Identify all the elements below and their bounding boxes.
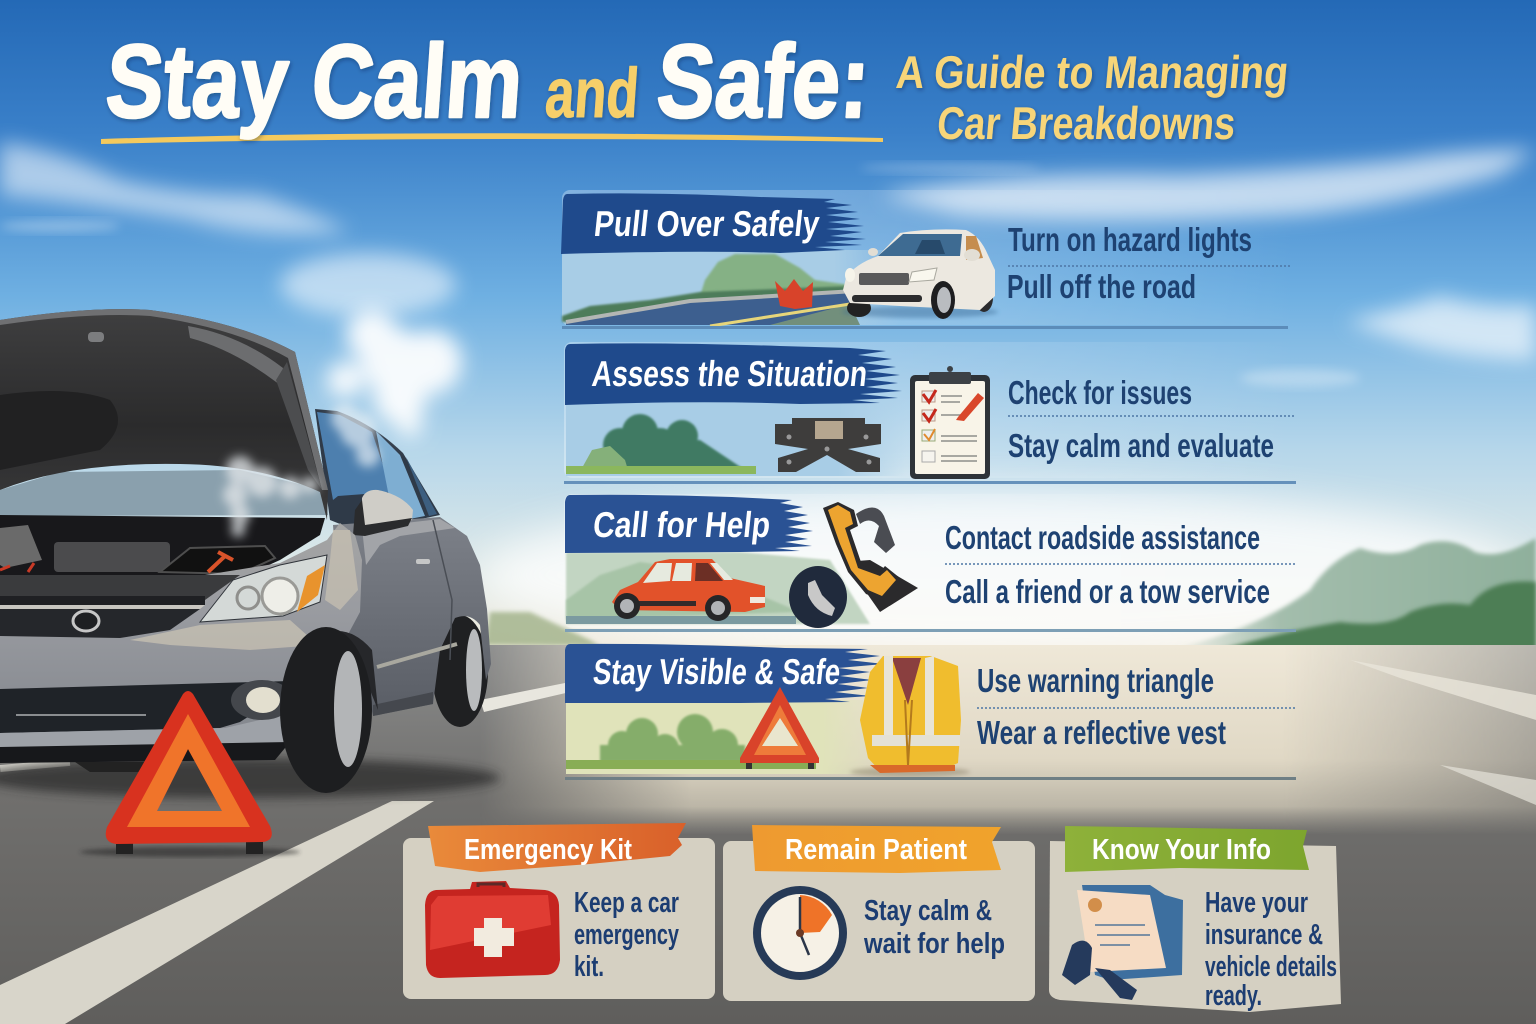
open hood (0, 309, 328, 520)
icon: first aid kit (425, 881, 560, 978)
banner heading (561, 193, 866, 254)
bullet list (945, 519, 1296, 610)
card: Emergency Kit (403, 823, 715, 999)
subtitle (894, 46, 1291, 149)
banner heading (565, 644, 884, 703)
windshield under hood (0, 470, 328, 516)
bullet list: Use warning triangle (977, 662, 1214, 699)
card text: kit. (574, 951, 604, 983)
title underline (101, 133, 883, 144)
card text: Stay calm & (864, 895, 992, 927)
card text: ready. (1205, 980, 1262, 1012)
rear wheel (432, 615, 488, 727)
heading: Stay Calm and Safe: and (543, 54, 641, 132)
card heading: Remain Patient (785, 834, 967, 866)
bullet list: Pull off the road (1007, 268, 1196, 305)
subtitle: Car Breakdowns (935, 97, 1238, 149)
card text: emergency (574, 919, 679, 951)
large warning triangle (80, 691, 300, 857)
icon: clock (753, 886, 847, 980)
icon: clipboard (910, 366, 990, 479)
card text (1205, 887, 1337, 1012)
front wheel (280, 627, 378, 793)
heading: Stay Calm and Safe (102, 24, 873, 140)
headlight (200, 555, 327, 622)
card text: Keep a car (574, 887, 679, 919)
background sky (0, 0, 1536, 660)
icon: telephone (789, 502, 918, 628)
card text: Have your (1205, 887, 1308, 919)
side mirror (353, 490, 413, 536)
panel: Pull Over Safely (561, 190, 1297, 329)
card text (863, 895, 1005, 960)
card heading (752, 825, 1001, 873)
icon: white car (842, 229, 998, 319)
bullet list: Wear a reflective vest (977, 714, 1226, 751)
card heading (428, 823, 686, 872)
card text: wait for help (863, 928, 1005, 960)
distant trees (485, 538, 1536, 650)
engine bay (0, 515, 325, 578)
bullet list: Call a friend or a tow service (945, 573, 1270, 610)
bullet list (1007, 221, 1292, 305)
bullet list: Turn on hazard lights (1008, 221, 1252, 258)
bullet list: Contact roadside assistance (945, 519, 1260, 556)
card text: insurance & (1205, 919, 1323, 951)
icon: warning marker (775, 279, 813, 309)
heading: Stay Calm and Safe: Safe: (653, 24, 873, 140)
card heading (1065, 826, 1309, 872)
banner heading: Stay Visible & Safe (591, 651, 842, 692)
card heading: Know Your Info (1092, 834, 1271, 866)
card text: vehicle details (1205, 951, 1337, 983)
icon: scissor jack (775, 418, 881, 472)
car shadow (0, 758, 500, 798)
bullet list (1008, 374, 1296, 464)
bullet list: Stay calm and evaluate (1008, 427, 1274, 464)
title (101, 24, 1291, 149)
icon: red car (612, 559, 765, 621)
fog light (231, 680, 293, 720)
card: Know Your Info (1049, 826, 1341, 1012)
icon: reflective vest (850, 656, 970, 777)
card: Remain Patient (723, 825, 1035, 1001)
banner heading (565, 495, 813, 553)
bullet list (977, 662, 1296, 751)
icon: small warning triangle (740, 687, 819, 769)
panel: Call for Help (564, 494, 1296, 632)
card text (574, 887, 679, 983)
clouds (0, 142, 1536, 660)
scene: hills (566, 552, 870, 624)
lower bumper (0, 681, 295, 772)
scene: trees (566, 400, 906, 476)
grille and logo (0, 605, 205, 638)
hero illustration: broken-down car (0, 309, 500, 798)
car front body (0, 523, 362, 762)
rear car body (333, 517, 491, 716)
panel: Assess the Situation (564, 342, 1297, 484)
bullet list: Check for issues (1008, 374, 1192, 411)
panel: Stay Visible and Safe (565, 644, 1296, 780)
banner heading (565, 343, 902, 405)
scene: roadside (562, 250, 902, 326)
icon: documents and key (1062, 885, 1183, 1000)
banner heading: Call for Help (591, 504, 772, 545)
card heading: Emergency Kit (464, 834, 632, 866)
banner heading: Pull Over Safely (592, 203, 821, 244)
car roof and side windows (315, 409, 440, 532)
steam (223, 309, 462, 537)
scene: meadow (566, 700, 886, 774)
heading: Stay Calm and Safe: Stay Calm (102, 24, 526, 140)
road (0, 645, 1536, 1024)
banner heading: Assess the Situation (590, 353, 869, 394)
subtitle: A Guide to Managing (894, 46, 1291, 98)
